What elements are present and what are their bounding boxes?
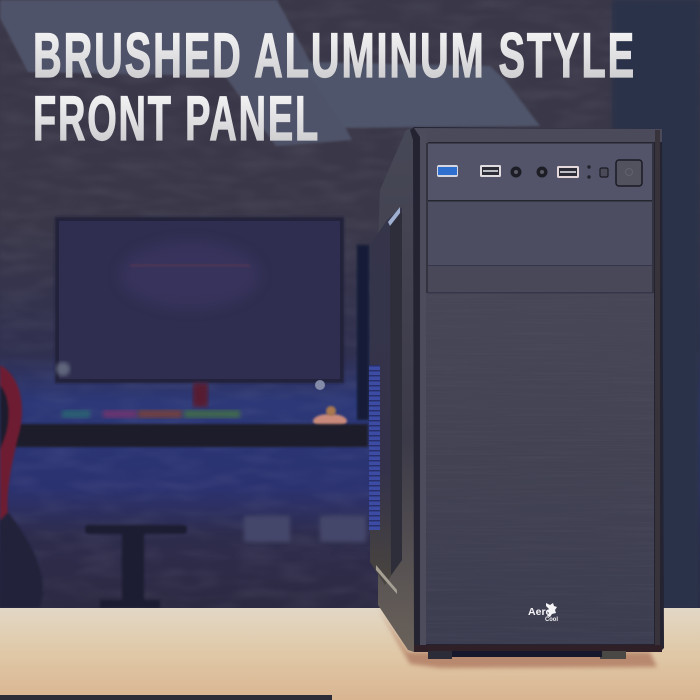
wall outlets: [244, 516, 366, 542]
gaming chair: [0, 365, 43, 607]
io port: usb 3 blue: [437, 165, 458, 177]
stool: [85, 525, 187, 608]
power button: [616, 160, 642, 186]
io port: mic jack: [536, 166, 548, 178]
dark wall post: [357, 245, 369, 420]
aerocool logo: Cool: [545, 617, 558, 623]
aerocool logo: [528, 603, 558, 623]
led indicators: [587, 165, 591, 179]
bottom bar: [0, 695, 332, 700]
computer case: [369, 127, 664, 659]
case feet: [428, 651, 626, 659]
case front frame: [410, 127, 664, 652]
wall monitor: [55, 217, 344, 407]
light panels on wall: [0, 0, 540, 146]
title: [33, 21, 636, 154]
io port: usb 2 right: [557, 166, 579, 178]
io port: usb 2 left: [480, 165, 501, 177]
brushed front panel: [426, 142, 654, 644]
dark right column: [612, 0, 700, 610]
wooden desk: [0, 608, 700, 700]
io port: audio jack: [510, 166, 522, 178]
aerocool logo: Aero: [528, 607, 552, 618]
case side panel: [369, 128, 414, 652]
shelf with keyboard lights: [8, 406, 368, 447]
title line 2: FRONT PANEL: [33, 84, 320, 154]
reset button: [600, 168, 608, 177]
case shadow on desk: [378, 607, 657, 668]
